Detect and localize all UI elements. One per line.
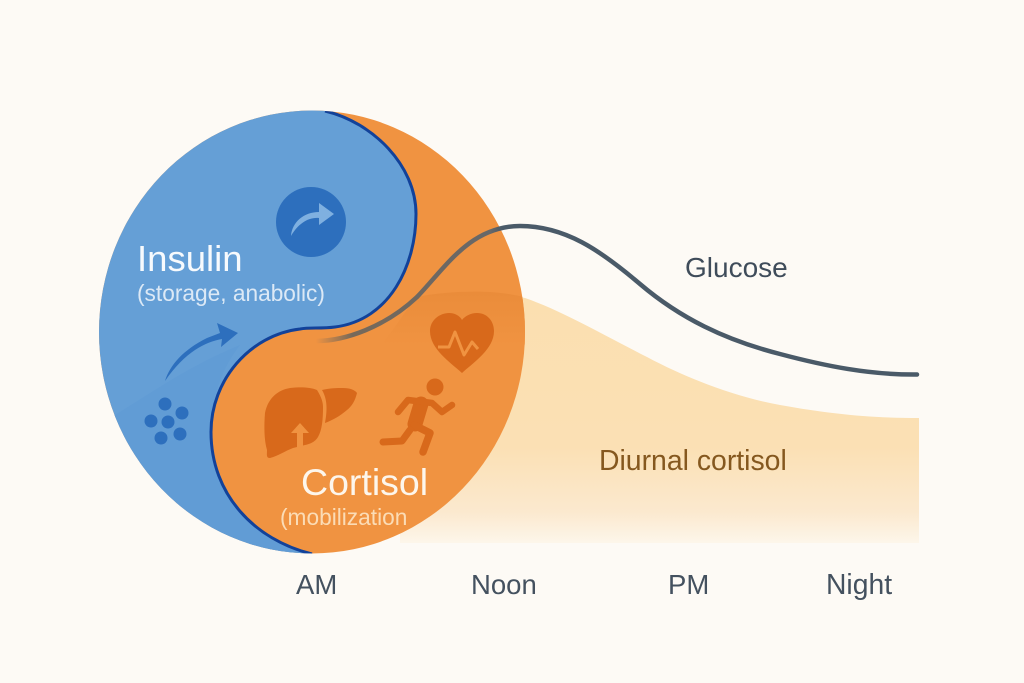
heading: Insulin: Insulin (137, 238, 243, 279)
label: AM: AM (296, 569, 337, 600)
label: Glucose: Glucose (685, 252, 788, 283)
label: Diurnal cortisol: Diurnal cortisol (599, 445, 787, 477)
text: storage, anabolic: (storage, anabolic) (137, 280, 325, 306)
text: mobilization: (mobilization (280, 504, 407, 530)
x axis labels (296, 568, 892, 600)
area: diurnal cortisol (400, 291, 919, 543)
icon: glucose dots (144, 398, 188, 444)
lower blue shade (114, 415, 309, 554)
label: Noon: Noon (471, 569, 537, 600)
cortisol overlay band (522, 296, 525, 345)
icon: heart with pulse (430, 313, 494, 373)
orange half (90, 100, 535, 565)
heading: Cortisol: Cortisol (301, 461, 428, 503)
icon: circular arrow badge (276, 187, 346, 257)
label: Night: Night (826, 568, 892, 600)
infographic canvas (99, 110, 920, 600)
icon: liver with arrow (264, 387, 357, 458)
icon: running person (383, 378, 452, 452)
blue half (90, 100, 416, 565)
label: PM: PM (668, 569, 709, 600)
s-curve divider (211, 111, 416, 554)
yin-yang circle (90, 100, 535, 565)
icon: curved blue arrow (165, 323, 238, 381)
glucose curve (316, 226, 917, 375)
